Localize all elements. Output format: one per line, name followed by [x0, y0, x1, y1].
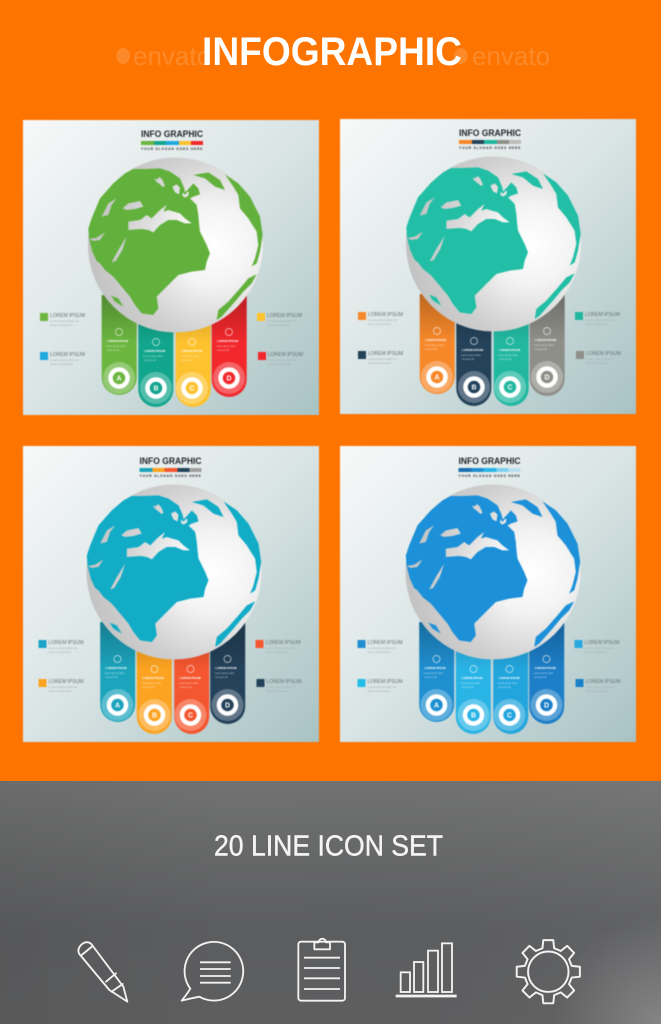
ribbons: Lorem ipsum dolor [424, 344, 444, 347]
ribbons: sit amet elit [144, 359, 156, 362]
badges A B C D: C [507, 384, 513, 392]
watermark: envato: envato [472, 41, 550, 71]
ribbons: Lorem ipsum dolor [461, 354, 481, 357]
ribbons: LOREM IPSUM [498, 676, 520, 680]
heading: icon set: 20 LINE ICON SET [214, 830, 443, 862]
legend: amet consectetur [368, 322, 391, 326]
badges A B C D: A [115, 702, 120, 710]
icon: gear [517, 940, 580, 1003]
legend: amet consectetur [48, 650, 72, 654]
legend: amet consectetur [268, 362, 291, 366]
ribbons: LOREM IPSUM [462, 676, 483, 680]
panel: cyan globe infographic [23, 446, 319, 742]
legend: amet consectetur [267, 323, 290, 327]
heading: INFO GRAPHIC [458, 456, 521, 467]
badges A B C D [102, 689, 244, 731]
globe [406, 156, 581, 332]
legend: amet consectetur [266, 650, 289, 654]
ribbons: Lorem ipsum dolor [498, 354, 518, 357]
legend: amet consectetur [586, 689, 609, 693]
badges A B C D: C [507, 712, 512, 720]
heading [459, 128, 521, 150]
ribbons: LOREM IPSUM [217, 339, 239, 343]
legend: Lorem ipsum dolor sit [50, 358, 79, 362]
ribbons [419, 622, 564, 734]
ribbons: sit amet elit [217, 349, 229, 352]
legend: Lorem ipsum dolor sit [586, 685, 614, 689]
ribbons: LOREM IPSUM [534, 666, 556, 670]
icon: pencil [78, 942, 127, 1002]
legend: amet consectetur [368, 361, 391, 365]
legend [38, 640, 302, 693]
heading: INFO GRAPHIC [141, 129, 203, 140]
badges A B C D: C [188, 712, 193, 720]
legend: amet consectetur [50, 323, 73, 327]
legend: LOREM IPSUM [586, 351, 621, 357]
ribbons: sit amet elit [534, 676, 547, 679]
heading: YOUR SLOGAN GOES HERE [458, 474, 521, 478]
ribbons: Lorem ipsum dolor [214, 672, 235, 675]
ribbons: sit amet elit [216, 676, 228, 679]
panel: blue globe infographic [340, 446, 636, 742]
ribbons: sit amet elit [498, 686, 511, 689]
ribbons [100, 622, 245, 734]
ribbons: sit amet elit [425, 348, 437, 351]
heading: YOUR SLOGAN GOES HERE [459, 146, 521, 150]
legend: LOREM IPSUM [268, 352, 303, 358]
icon: bar chart [396, 943, 457, 996]
ribbons: sit amet elit [462, 686, 474, 689]
ribbons: LOREM IPSUM [181, 349, 203, 353]
heading [458, 456, 521, 478]
watermark: envato: envato [133, 41, 211, 71]
legend: amet consectetur [266, 689, 290, 693]
legend: Lorem ipsum dolor sit [368, 646, 396, 650]
badges A B C D: D [226, 376, 232, 382]
ribbons: Lorem ipsum dolor [534, 344, 554, 347]
legend: LOREM IPSUM [368, 312, 403, 318]
legend: Lorem ipsum dolor sit [584, 646, 613, 650]
ribbons: Lorem ipsum dolor [424, 672, 444, 675]
ribbons: Lorem ipsum dolor [180, 355, 200, 358]
ribbons: sit amet elit [142, 686, 155, 689]
legend: amet consectetur [50, 362, 73, 366]
ribbons: LOREM IPSUM [535, 338, 557, 342]
legend: Lorem ipsum dolor sit [48, 685, 77, 689]
heading: YOUR SLOGAN GOES HERE [140, 474, 202, 478]
legend: Lorem ipsum dolor sit [368, 357, 397, 361]
legend: Lorem ipsum dolor sit [266, 646, 294, 650]
badges A B C D: D [544, 374, 550, 382]
badges A B C D: A [116, 376, 122, 382]
ribbons: Lorem ipsum dolor [104, 672, 125, 675]
heading: INFO GRAPHIC [140, 456, 202, 467]
badges A B C D [420, 689, 562, 731]
legend: Lorem ipsum dolor sit [368, 685, 396, 689]
ribbons: LOREM IPSUM [142, 676, 164, 680]
legend: LOREM IPSUM [585, 312, 620, 318]
ribbons: LOREM IPSUM [499, 348, 521, 352]
legend: Lorem ipsum dolor sit [50, 319, 79, 323]
legend: Lorem ipsum dolor sit [267, 319, 296, 323]
ribbons: LOREM IPSUM [216, 666, 237, 670]
legend: LOREM IPSUM [267, 313, 302, 319]
ribbons: Lorem ipsum dolor [143, 355, 163, 358]
ribbons: LOREM IPSUM [424, 666, 446, 670]
legend: LOREM IPSUM [368, 351, 403, 357]
badges A B C D: A [434, 702, 439, 710]
legend [358, 312, 621, 365]
legend: Lorem ipsum dolor sit [48, 646, 77, 650]
icon: speech bubble [182, 942, 243, 1001]
ribbons [420, 294, 565, 406]
legend: LOREM IPSUM [50, 313, 85, 319]
ribbons: sit amet elit [106, 676, 118, 679]
panel: green globe infographic [23, 120, 319, 415]
ribbons: LOREM IPSUM [144, 349, 166, 353]
ribbons: Lorem ipsum dolor [216, 345, 236, 348]
legend: LOREM IPSUM [368, 640, 403, 646]
badges A B C D: D [225, 702, 230, 710]
ribbons [102, 295, 247, 407]
ribbons: LOREM IPSUM [425, 338, 447, 342]
legend: amet consectetur [586, 361, 609, 365]
legend: amet consectetur [584, 650, 608, 654]
ribbons: sit amet elit [180, 686, 192, 689]
ribbons: sit amet elit [499, 358, 511, 361]
ribbons: sit amet elit [181, 359, 193, 362]
heading [140, 456, 202, 478]
legend: LOREM IPSUM [584, 640, 620, 646]
legend: LOREM IPSUM [266, 640, 301, 646]
badges A B C D: B [152, 712, 157, 720]
heading: YOUR SLOGAN GOES HERE [141, 147, 203, 151]
legend: LOREM IPSUM [368, 679, 403, 685]
legend: LOREM IPSUM [48, 679, 84, 685]
badges A B C D [103, 362, 245, 404]
badges A B C D: B [471, 384, 477, 392]
panel: grey icon band [0, 781, 661, 1024]
legend: LOREM IPSUM [586, 679, 621, 685]
ribbons: Lorem ipsum dolor [178, 682, 199, 685]
ribbons: Lorem ipsum dolor [460, 682, 481, 685]
badges A B C D: A [434, 374, 440, 382]
legend: Lorem ipsum dolor sit [268, 358, 297, 362]
ribbons: LOREM IPSUM [106, 666, 127, 670]
ribbons: sit amet elit [424, 676, 437, 679]
legend: amet consectetur [368, 689, 391, 693]
title: INFOGRAPHIC [202, 30, 462, 74]
legend: amet consectetur [585, 322, 608, 326]
legend: LOREM IPSUM [50, 352, 85, 358]
legend [40, 313, 303, 366]
ribbons: Lorem ipsum dolor [142, 682, 162, 685]
legend: Lorem ipsum dolor sit [585, 318, 614, 322]
ribbons: LOREM IPSUM [107, 339, 129, 343]
ribbons: sit amet elit [535, 348, 547, 351]
legend: LOREM IPSUM [266, 679, 302, 685]
globe [88, 158, 263, 332]
ribbons: LOREM IPSUM [462, 348, 484, 352]
badges A B C D: D [544, 702, 549, 710]
ribbons: sit amet elit [462, 358, 474, 361]
globe [86, 484, 262, 660]
legend: Lorem ipsum dolor sit [586, 357, 615, 361]
legend: LOREM IPSUM [48, 640, 84, 646]
legend: amet consectetur [368, 650, 391, 654]
legend: Lorem ipsum dolor sit [266, 685, 295, 689]
ribbons: Lorem ipsum dolor [534, 672, 554, 675]
globe [406, 484, 580, 660]
badges A B C D: B [153, 386, 159, 392]
legend: amet consectetur [48, 689, 72, 693]
ribbons: Lorem ipsum dolor [498, 682, 518, 685]
heading [141, 129, 203, 151]
heading: INFO GRAPHIC [459, 128, 521, 139]
badges A B C D [421, 361, 563, 403]
ribbons: Lorem ipsum dolor [106, 345, 126, 348]
icon: clipboard [298, 939, 345, 1001]
badges A B C D: B [471, 712, 476, 720]
watermark: envato [116, 41, 550, 71]
orange background [0, 0, 661, 781]
ribbons: sit amet elit [107, 349, 119, 352]
legend: Lorem ipsum dolor sit [368, 318, 397, 322]
legend [358, 640, 621, 693]
panel: teal globe infographic [340, 119, 636, 414]
ribbons: LOREM IPSUM [180, 676, 201, 680]
badges A B C D: C [189, 386, 195, 392]
